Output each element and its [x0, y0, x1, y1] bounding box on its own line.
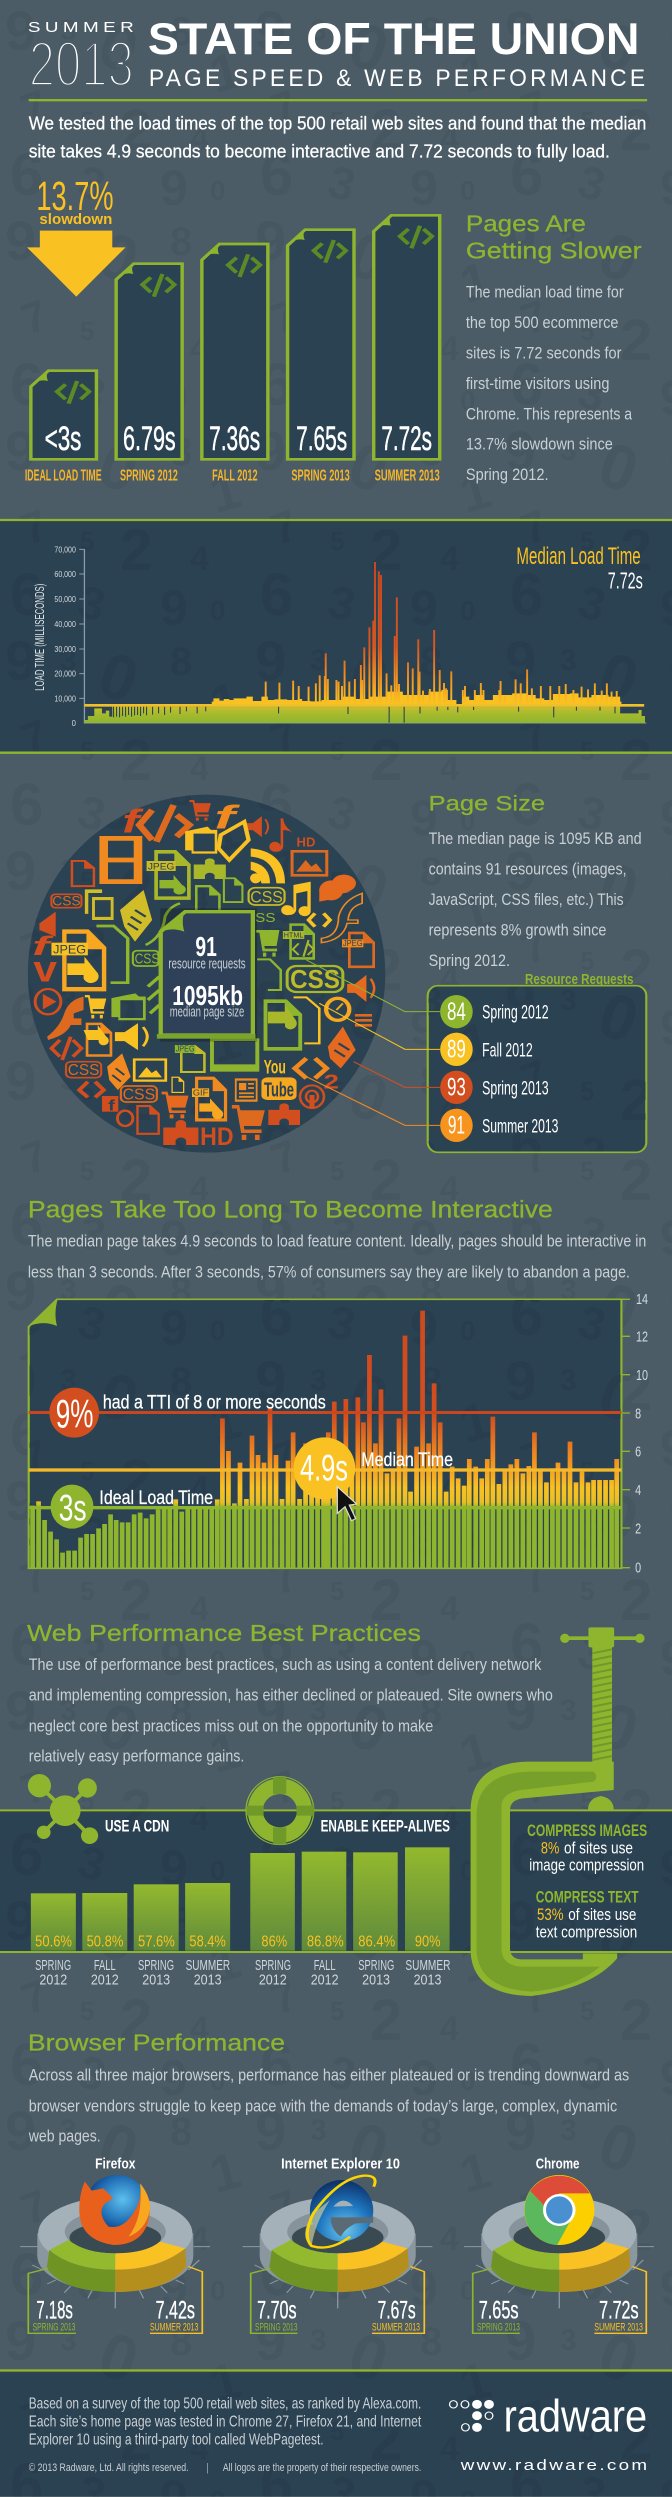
yellow base bars [212, 690, 621, 707]
icon: wordpress [117, 1111, 133, 1126]
callout: ideal 3s [51, 1485, 213, 1529]
logo: radware [450, 2391, 647, 2441]
period labels: SPRING [255, 1957, 291, 1973]
badge: spring 2013: 93 [447, 1074, 466, 1102]
y axis: 20,000 [54, 670, 76, 679]
slowdown percent: 13.7% [36, 174, 114, 220]
right axis: 4 [635, 1481, 641, 1498]
bar: summer 2013: 7.72s [381, 420, 432, 458]
badge: fall 2012 [440, 1033, 533, 1066]
bar: summer 2013 [372, 214, 440, 459]
right axis: 6 [635, 1443, 641, 1460]
text: copyright: All logos are the property of their respective owners. [223, 2461, 421, 2474]
right axis: 14 [636, 1290, 648, 1307]
icon: play [35, 989, 61, 1014]
right axis: 2 [635, 1519, 641, 1537]
line: 8s [29, 1411, 621, 1414]
right axis: 0 [635, 1558, 641, 1576]
text: copyright: | [207, 2461, 208, 2474]
callout: ideal 3s: 3s [59, 1488, 87, 1529]
icon: film low [210, 1038, 259, 1072]
heading: interactive: Pages Take Too Long To Become Interactive [28, 1196, 553, 1223]
bar: fall 2012: 7.36s [209, 420, 260, 458]
ring [20, 2197, 210, 2308]
heading: best practices: Web Performance Best Practices [27, 1620, 421, 1646]
bar chart: cdn: 58.4% [189, 1932, 226, 1950]
period labels: 2012 [311, 1972, 339, 1988]
centre doc [157, 908, 257, 1042]
icon: photo mark [159, 875, 186, 895]
label: css mid [133, 950, 159, 967]
text: methodology: Explorer 10 using a third-party tool called WebPagetest. [29, 2430, 324, 2448]
right axis [621, 1290, 648, 1576]
icon: hd: HD [297, 835, 315, 850]
icon: photos low [111, 993, 146, 1020]
period labels [35, 1957, 450, 1988]
icon: ie logo [305, 2176, 375, 2248]
panel: time to interactive [28, 1196, 648, 1576]
icon: youtube: Tube [264, 1078, 294, 1102]
right axis: 8 [635, 1404, 641, 1422]
period labels: SPRING [35, 1957, 71, 1973]
bar chart: cdn: 50.8% [87, 1932, 123, 1950]
icon: cart left [85, 995, 106, 1018]
callout: compress text [536, 1889, 639, 1942]
icon: doc outline [96, 926, 128, 983]
clamp foot [588, 1796, 614, 1810]
period labels: 2012 [259, 1972, 287, 1988]
bar: ideal load time: <3s [45, 420, 81, 458]
heading: pages are getting slower: Getting Slower [466, 237, 642, 264]
line: median [29, 1468, 621, 1472]
icon: photo mark gif [199, 1098, 223, 1119]
icon: puzzle bottom [163, 1120, 198, 1145]
icon: chevrons bottom left [79, 1082, 104, 1097]
arrow down [27, 231, 126, 297]
text: best practices description: relatively easy performance gains. [29, 1747, 244, 1766]
icon: doc bottom [136, 1105, 160, 1135]
heading: page size: Page Size [429, 792, 545, 816]
bar chart: keep-alives: 86.4% [358, 1932, 395, 1950]
period labels: 2013 [414, 1972, 441, 1988]
brackets [251, 2268, 297, 2333]
label: jpeg left: JPEG [53, 942, 86, 956]
line: ideal [29, 1506, 621, 1509]
values [477, 2297, 643, 2333]
icon: youtube: You [264, 1056, 286, 1078]
icon: cart center [256, 930, 279, 957]
value: 91: 91 [195, 932, 217, 962]
chart rules [0, 520, 672, 753]
values: SPRING 2013 [477, 2321, 520, 2333]
icon: small doc [223, 877, 243, 903]
callout: 9% [49, 1388, 326, 1438]
icon: vimeo: v [33, 949, 58, 989]
panel: page size [28, 792, 646, 1153]
title rule [29, 99, 647, 101]
bar labels: SPRING 2012 [120, 467, 178, 484]
period labels: SUMMER [186, 1957, 230, 1973]
icon: flash big [47, 997, 84, 1040]
icon: cursor [337, 1487, 357, 1521]
band background [0, 1810, 672, 1952]
icon: facebook: f [108, 1098, 115, 1114]
icon: hd bottom: HD [200, 1123, 234, 1151]
icon: photo mark right [268, 1005, 297, 1029]
callout: compress text: 53% [537, 1906, 564, 1924]
label: css big: CSS [290, 965, 340, 994]
ring [243, 2197, 432, 2308]
icon: jpeg small [348, 932, 375, 968]
icon: pages [85, 889, 114, 920]
right axis: 10 [636, 1366, 648, 1383]
icon: podcast [300, 1085, 324, 1108]
icon: doc outline center right [257, 959, 281, 990]
icon: puzzle right [268, 1103, 300, 1125]
icon: list [355, 1014, 372, 1027]
callout: median 4.9s: Median Time [361, 1448, 453, 1470]
callout: median 4.9s [294, 1437, 453, 1499]
panel: resource requests [306, 960, 646, 1152]
label: gif: GIF [193, 1089, 208, 1098]
period labels: 2012 [91, 1972, 119, 1988]
icon: chevrons low [295, 1058, 327, 1078]
icon: clamp [471, 1627, 645, 1996]
icon: firefox logo [79, 2175, 150, 2245]
period labels: 2013 [194, 1972, 222, 1988]
period labels: SPRING [138, 1957, 174, 1973]
icon: jpeg doc [154, 850, 191, 900]
clamp screw [592, 1647, 612, 1763]
label: css low: CSS [123, 1085, 155, 1103]
bar chart: cdn [31, 1883, 230, 1951]
label: css left: CSS [52, 894, 81, 909]
callout: compress images: of sites use [564, 1839, 633, 1858]
panel: browser performance [20, 2030, 654, 2333]
panel: resource requests: Summer 2013 [482, 1114, 558, 1137]
icon: cart low [162, 1092, 189, 1118]
band rules [0, 1810, 672, 1952]
icon: photo mark low [84, 1025, 109, 1045]
clamp body [471, 1762, 617, 1996]
icon: jpeg low [180, 1045, 206, 1073]
icon: small doc low [171, 1077, 184, 1093]
icon: note [269, 818, 294, 852]
values: SPRING 2013 [255, 2321, 297, 2333]
panel: resource requests: Fall 2012 [482, 1038, 533, 1061]
icon: speaker low [115, 1023, 149, 1050]
icon: small 2: 2 [324, 1070, 339, 1093]
clamp handle [560, 1627, 645, 1647]
spikes [266, 562, 617, 704]
icon: code low [51, 1037, 81, 1060]
label: median page size: median page size [170, 1004, 244, 1020]
period labels: 2013 [362, 1972, 390, 1988]
panel: resource requests: Spring 2012 [482, 1000, 549, 1023]
label: css low left: CSS [68, 1061, 99, 1078]
right axis: 12 [636, 1328, 648, 1345]
icon: image low [133, 1058, 167, 1082]
ring [464, 2197, 654, 2308]
clamp body shade [477, 1772, 600, 1992]
callout: 9%: 9% [56, 1392, 93, 1436]
browser: chrome [464, 2154, 654, 2333]
circle background [28, 795, 385, 1153]
icon: photos [185, 827, 217, 854]
bar: spring 2013 [286, 228, 354, 459]
icon: cart [189, 800, 211, 821]
name: firefox: Firefox [95, 2154, 136, 2172]
icon: image [291, 850, 328, 877]
icon: photo mark left [67, 957, 99, 983]
year 2013: 2013 [29, 28, 134, 100]
icon: gif doc [195, 1077, 227, 1121]
label: css top: CSS [250, 888, 283, 907]
icon: scroll right [328, 1027, 356, 1068]
text: page size description: Spring 2012. [429, 951, 510, 970]
bar labels: SPRING 2013 [291, 467, 350, 484]
subtitle: PAGE SPEED & WEB PERFORMANCE [149, 65, 645, 91]
icon: youtube [261, 1056, 297, 1102]
bar chart: keep-alives [250, 1847, 450, 1951]
icon: puzzle [194, 858, 226, 879]
text: copyright [29, 2461, 421, 2474]
icon: code html [293, 940, 314, 957]
icon: news [235, 1078, 258, 1102]
label: jpeg low: JPEG [176, 1045, 195, 1053]
callout: 9%: had a TTI of 8 or more seconds [103, 1390, 326, 1413]
panel: header and load time bars [25, 14, 647, 484]
callout: slowdown [27, 174, 126, 297]
bar labels: IDEAL LOAD TIME [25, 467, 102, 484]
icon: chevrons [309, 913, 330, 927]
y axis: 0 [72, 719, 76, 729]
median line [84, 704, 644, 707]
icon: speaker left [39, 912, 56, 937]
label: css mid: CSS [135, 950, 159, 967]
period labels: 2013 [142, 1972, 170, 1988]
label: jpeg right: JPEG [343, 939, 363, 948]
badge: summer 2013 [440, 1109, 558, 1142]
y axis: 70,000 [54, 545, 76, 555]
icon: flash: f [122, 803, 144, 840]
icon: brochure [219, 822, 249, 860]
bar: spring 2013: 7.65s [296, 420, 347, 458]
values: 7.67s [378, 2297, 416, 2324]
y axis: 60,000 [54, 570, 76, 580]
icon: cart bottom [232, 1105, 265, 1140]
callout: median 4.9s: 4.9s [300, 1448, 348, 1489]
panel: resource requests: Spring 2013 [482, 1076, 549, 1099]
heading: pages are getting slower: Pages Are [466, 211, 586, 237]
heading: pages are getting slower [466, 211, 642, 264]
icon: html doc [71, 860, 95, 887]
icon: speaker [246, 816, 269, 837]
badge: spring 2013 [440, 1071, 549, 1104]
icon: flash left: f [32, 931, 54, 961]
browser: internet explorer [243, 2154, 432, 2333]
footer rule [0, 2369, 672, 2372]
icon: flash outline [321, 893, 362, 943]
values: 7.42s [156, 2297, 195, 2324]
label: html: HTML [284, 931, 304, 939]
label: use a cdn: USE A CDN [105, 1817, 169, 1836]
panel: best practices [0, 1620, 672, 1996]
text: interactive description [28, 1232, 646, 1282]
browser: internet explorer: SUMMER 2013 [372, 2321, 420, 2333]
values [255, 2297, 420, 2333]
y axis title: LOAD TIME (MILLISECONDS) [33, 584, 47, 691]
icon: note 2 [281, 882, 311, 916]
brackets [473, 2268, 520, 2333]
bar chart: cdn: 57.6% [138, 1932, 175, 1950]
badge: spring 2012: 84 [447, 998, 466, 1026]
chart frame [29, 1299, 621, 1568]
values: SPRING 2013 [33, 2321, 75, 2333]
chart: tti [28, 1290, 648, 1576]
label: enable keep-alives: ENABLE KEEP-ALIVES [321, 1817, 450, 1836]
panel: header and load time bars: SUMMER 2013 [375, 467, 440, 484]
panel: footer [0, 2369, 672, 2496]
bar: ideal load time [29, 369, 96, 459]
label: jpeg: JPEG [148, 862, 174, 872]
name: ie: Internet Explorer 10 [281, 2154, 400, 2172]
values: 7.18s [36, 2297, 73, 2324]
bar chart: keep-alives: 86% [261, 1932, 287, 1950]
badge: spring 2012 [440, 995, 549, 1028]
bar chart: keep-alives: 90% [415, 1932, 441, 1950]
icon: flash outline center [146, 903, 180, 945]
bar: spring 2012 [114, 262, 182, 459]
icon: doc outline right [294, 997, 319, 1043]
chart background [0, 519, 672, 752]
leader lines [306, 960, 440, 1125]
y axis: 10,000 [54, 694, 76, 704]
icon: lifebuoy [246, 1777, 314, 1845]
badge: fall 2012: 89 [447, 1036, 466, 1064]
icon: chrome logo [524, 2175, 594, 2245]
icon: cdn network [28, 1774, 98, 1844]
icon: doc low left [86, 1023, 112, 1057]
callout: compress images: 8% [541, 1839, 559, 1858]
icon circle [28, 795, 385, 1153]
text: best practices description [29, 1655, 553, 1766]
icon: doc center [195, 885, 221, 918]
icon: film [99, 836, 142, 884]
icon: scroll [120, 890, 152, 942]
bar: spring 2012: 6.79s [123, 420, 176, 458]
browser: firefox: SUMMER 2013 [150, 2321, 198, 2333]
text: browser description: web pages. [28, 2127, 101, 2146]
y axis: 50,000 [54, 595, 76, 605]
text: page size description [429, 829, 642, 970]
panel: median load time chart [0, 519, 672, 753]
icon: scroll low [107, 1053, 131, 1090]
intro text [29, 114, 646, 162]
y axis: 40,000 [54, 620, 76, 630]
icon: clip [148, 977, 159, 1013]
value: 1095kb: 1095kb [172, 981, 243, 1011]
bar labels [25, 467, 440, 484]
icon: jpeg doc large [62, 929, 106, 991]
icon: clock [326, 998, 349, 1020]
label: css behind doc: SS [255, 911, 276, 925]
bar chart: cdn: 50.6% [35, 1932, 72, 1950]
text: load time description [466, 283, 632, 484]
label: resource requests: resource requests [168, 955, 246, 972]
period labels: SUMMER [405, 1957, 450, 1973]
url: www.radware.com [460, 2457, 647, 2473]
callout: compress images [527, 1822, 647, 1875]
icon: html doc center [289, 923, 315, 960]
browser: firefox [20, 2154, 210, 2333]
dark notches [114, 707, 615, 723]
period labels: FALL [314, 1957, 336, 1973]
text: copyright: © 2013 Radware, Ltd. All rights reserved. [29, 2461, 189, 2474]
heading: browser performance: Browser Performance [28, 2030, 285, 2056]
bars [33, 1311, 617, 1568]
text: browser description [28, 2066, 629, 2146]
name: chrome: Chrome [536, 2154, 580, 2172]
bar labels: FALL 2012 [212, 467, 258, 484]
y axis [54, 545, 646, 729]
logo dots [450, 2400, 493, 2431]
bar chart: keep-alives: 86.8% [307, 1932, 344, 1950]
callout: ideal 3s: Ideal Load Time [99, 1486, 213, 1508]
period labels: FALL [94, 1957, 116, 1973]
values: 7.65s [479, 2297, 519, 2324]
brackets [28, 2268, 76, 2333]
icon: doc right low [264, 999, 302, 1051]
icon: flash 2: f [214, 799, 240, 836]
icon: facebook [102, 1096, 118, 1114]
values [33, 2297, 198, 2333]
period labels: SPRING [358, 1957, 394, 1973]
footer background [0, 2370, 672, 2496]
values: 7.70s [257, 2297, 297, 2324]
icon: rss [250, 848, 285, 883]
label: summer: SUMMER [28, 19, 134, 35]
icon: code top [139, 805, 189, 842]
text: load time description: Spring 2012. [466, 465, 549, 484]
text: best practices description: neglect core best practices miss out on the opportunity to make [29, 1717, 433, 1736]
icon: speaker right [347, 975, 375, 1002]
green area [84, 707, 645, 723]
text: methodology [29, 2394, 421, 2448]
icon: chat [319, 875, 356, 902]
badge: summer 2013: 91 [448, 1112, 465, 1140]
fold [28, 1299, 58, 1327]
slowdown word: slowdown [39, 211, 112, 227]
bar: fall 2012 [200, 243, 268, 459]
period labels: 2012 [39, 1972, 67, 1988]
y axis: 30,000 [54, 645, 76, 655]
